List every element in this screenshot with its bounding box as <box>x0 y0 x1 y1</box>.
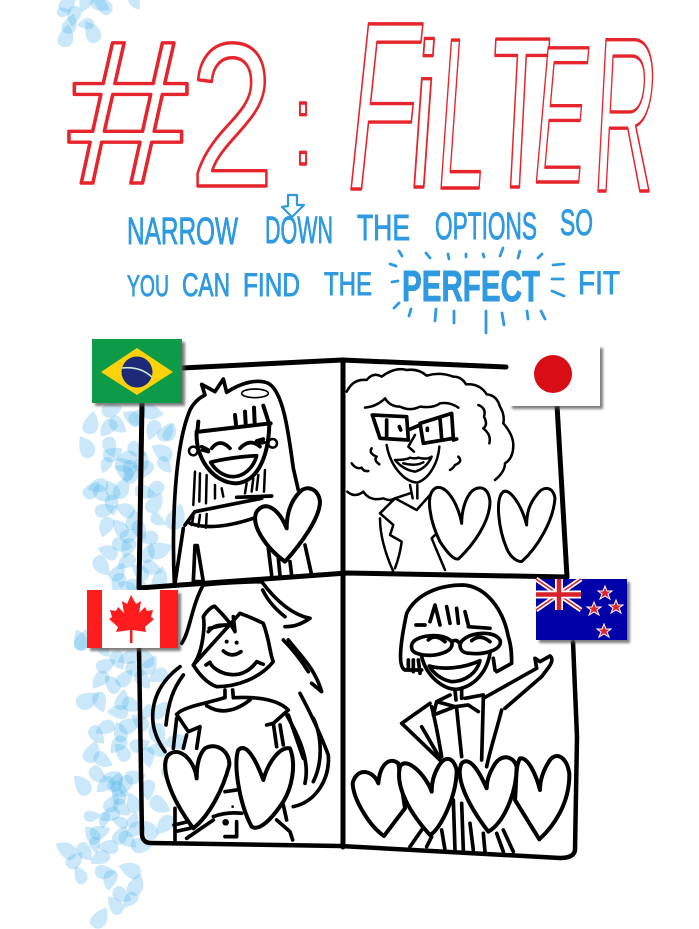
blue petal scatter, top-left corner <box>56 0 144 48</box>
title: #2: FILTER: : <box>294 61 312 189</box>
subtitle: hand-lettered tagline: OPTIONS <box>435 206 537 248</box>
subtitle: hand-lettered tagline: THE <box>357 207 410 248</box>
comic panel frame <box>139 360 577 858</box>
panel: Canada friend, two hearts <box>153 582 328 840</box>
face <box>193 606 273 687</box>
subtitle: hand-lettered tagline <box>127 195 620 333</box>
emphasis rays around PERFECT <box>390 248 564 333</box>
title: #2: FILTER: E <box>526 6 597 224</box>
title: #2: FILTER <box>68 0 663 240</box>
suit and raised arm <box>402 656 552 767</box>
hearts <box>430 487 490 559</box>
curly hair <box>347 369 513 500</box>
glasses <box>372 413 457 443</box>
title: #2: FILTER: 2 <box>190 1 274 230</box>
subtitle: hand-lettered tagline: YOU <box>127 270 169 303</box>
face with laughing expression <box>197 406 271 483</box>
panel: Japan friend, two hearts <box>347 369 555 572</box>
panel: Brazil friend, one heart <box>173 379 320 583</box>
long wavy hair <box>153 582 328 807</box>
top <box>380 485 445 572</box>
subtitle: hand-lettered tagline: CAN <box>182 267 230 303</box>
hearts <box>165 746 229 828</box>
trouser stripes <box>410 800 513 852</box>
title: #2: FILTER: # <box>68 0 188 227</box>
panel: New Zealand friend, four hearts <box>353 585 569 852</box>
icon: down arrow over DOWN <box>282 195 304 217</box>
subtitle: hand-lettered tagline: DOWN <box>265 210 333 252</box>
round glasses and laughing face <box>412 633 500 689</box>
blue petal scatter, left column <box>52 400 189 929</box>
subtitle: hand-lettered tagline: THE <box>324 266 372 302</box>
flag: Japan <box>509 345 600 406</box>
jeans <box>174 790 293 840</box>
long hair <box>173 379 298 583</box>
flag: New Zealand <box>536 579 627 640</box>
sweater <box>193 470 265 505</box>
flag: Canada <box>87 590 178 648</box>
hearts <box>353 761 405 836</box>
subtitle: hand-lettered tagline: NARROW <box>127 211 238 253</box>
flag: Brazil <box>92 339 182 403</box>
face <box>387 435 439 483</box>
title: #2: FILTER: L <box>431 0 496 234</box>
heart <box>255 488 320 562</box>
bob hair <box>401 585 512 673</box>
subtitle: hand-lettered tagline: SO <box>560 202 593 243</box>
t-shirt and arms <box>173 690 303 758</box>
subtitle: hand-lettered tagline: FIT <box>578 265 620 301</box>
title: #2: FILTER: i <box>404 2 444 231</box>
subtitle: hand-lettered tagline: FIND <box>243 267 300 303</box>
subtitle: hand-lettered tagline: PERFECT <box>402 262 540 311</box>
